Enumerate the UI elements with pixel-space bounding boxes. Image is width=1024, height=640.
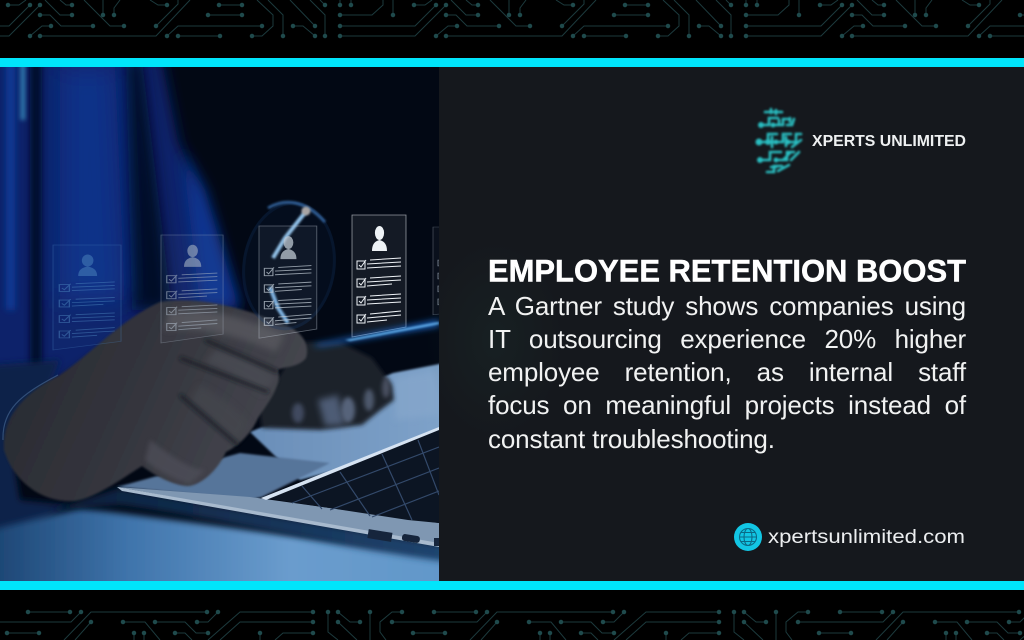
keyboard [264, 429, 439, 523]
candidate card 1 [53, 245, 121, 350]
candidate card 5 [432, 226, 439, 316]
website url: xpertsunlimited.com [768, 526, 965, 548]
body text: employee retention, as internal staff [488, 357, 966, 387]
candidate card 4 [352, 215, 406, 337]
body text [488, 291, 966, 454]
logo: circuit globe [756, 109, 801, 172]
body text: focus on meaningful projects instead of [488, 390, 966, 420]
cyan bar top [0, 58, 1024, 67]
blue light streak [312, 320, 439, 346]
right dark panel [425, 67, 1024, 581]
body text: IT outsourcing experience 20% higher [488, 324, 966, 354]
icon: globe [734, 523, 762, 551]
candidate card 3 [259, 226, 317, 338]
body text: A Gartner study shows companies using [488, 291, 966, 321]
bottom circuit pattern band [0, 612, 1024, 640]
cyan bar bottom [0, 581, 1024, 590]
laptop [117, 427, 440, 547]
jacket sleeve [0, 40, 240, 535]
magnifying glass lens [242, 199, 336, 330]
top circuit pattern band [0, 0, 1024, 36]
desk surface [0, 362, 450, 590]
photo: hands on laptop with candidate cards [0, 67, 439, 581]
front hand [3, 300, 307, 501]
back hand [258, 342, 394, 430]
heading: EMPLOYEE RETENTION BOOST [488, 252, 966, 288]
candidate card 2 [161, 235, 223, 343]
logo wordmark: XPERTS UNLIMITED [812, 133, 966, 150]
body text: constant troubleshooting. [488, 424, 775, 454]
